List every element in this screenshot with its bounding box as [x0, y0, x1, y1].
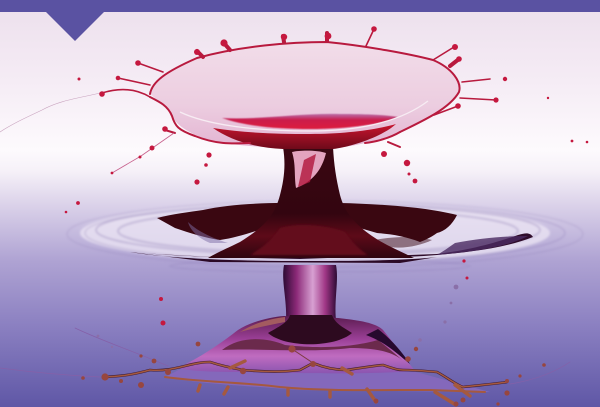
bowl inner white rim — [180, 101, 428, 131]
stem highlight twist — [292, 151, 326, 188]
brown droplets — [81, 342, 546, 406]
red droplets — [65, 26, 588, 325]
lavender droplets — [97, 285, 458, 348]
bowl liquid band — [222, 114, 398, 129]
crown rim and spikes — [0, 29, 496, 173]
splash crown bowl — [150, 42, 460, 149]
water surface ripples — [67, 201, 583, 272]
dark pool around the stem — [130, 203, 533, 263]
reflected splash rim — [0, 328, 570, 405]
header triangle marker — [46, 12, 104, 41]
top header band — [0, 0, 600, 12]
reflected base — [165, 315, 490, 392]
bowl underside — [213, 124, 396, 149]
reflected neck — [283, 265, 337, 320]
central stem — [208, 147, 414, 258]
